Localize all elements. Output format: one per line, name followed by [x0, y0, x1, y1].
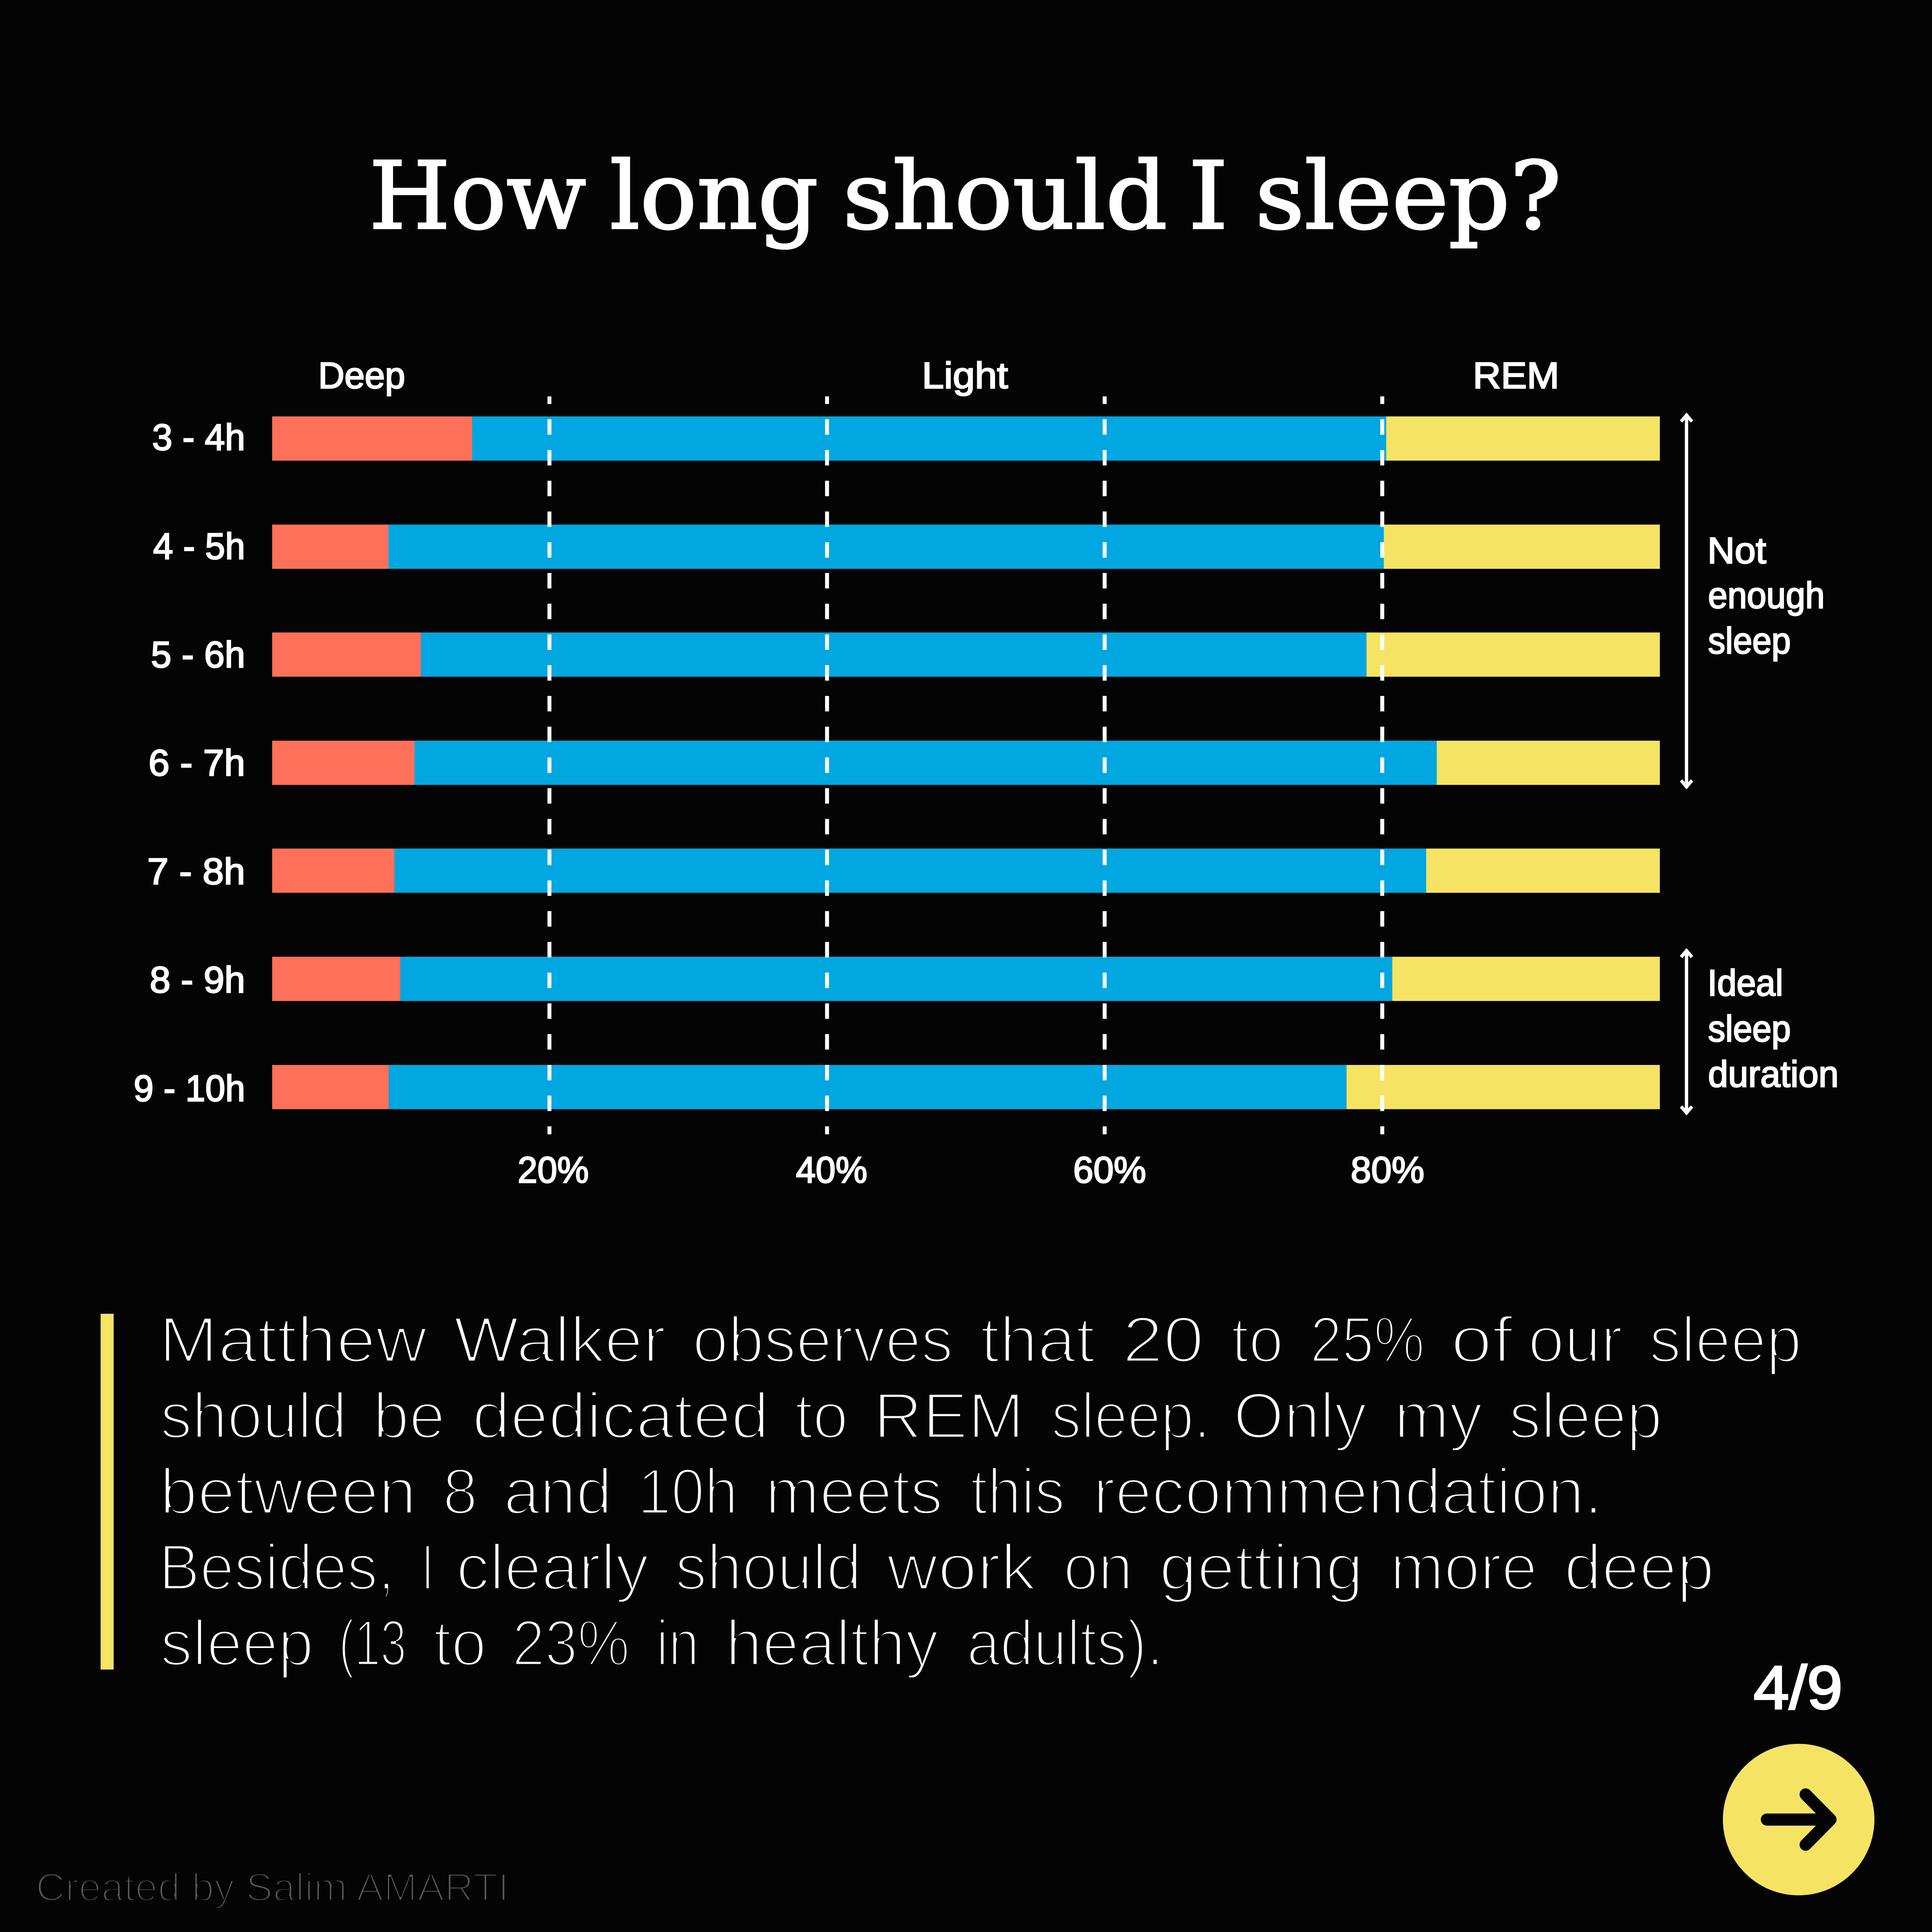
annotation: Not enough sleep: enough	[1708, 575, 1825, 616]
body text block: sleep	[1509, 1379, 1662, 1452]
credit: Created by Salim AMARTI	[36, 1865, 509, 1909]
row: 9 - 10h: 9 - 10h	[134, 1068, 245, 1109]
body text block: our	[1528, 1303, 1622, 1376]
title: I	[1188, 142, 1228, 250]
body text block: 8	[443, 1455, 478, 1528]
body text block: recommendation.	[1093, 1455, 1602, 1528]
annotation: Not enough sleep: Not	[1708, 530, 1766, 571]
body text block: sleep.	[1051, 1379, 1211, 1452]
body text block: Walker	[454, 1303, 666, 1376]
body text block: on	[1063, 1531, 1133, 1604]
body text block: to	[434, 1607, 486, 1679]
row: 7 - 8h	[147, 849, 1660, 893]
body text block: 20	[1122, 1303, 1204, 1376]
body text block: I	[422, 1531, 434, 1604]
row: 7 - 8h: 7 - 8h	[147, 851, 245, 892]
body text block: getting	[1159, 1531, 1364, 1604]
title: should	[843, 142, 1167, 250]
body text block	[159, 1303, 1802, 1679]
column heading: REM: REM	[1473, 355, 1559, 396]
quote accent bar	[100, 1314, 114, 1670]
body text block: dedicated	[472, 1379, 769, 1452]
body text block: Besides,	[159, 1531, 395, 1604]
body text block: adults).	[967, 1607, 1163, 1679]
body text block: more	[1390, 1531, 1537, 1604]
body text block: meets	[765, 1455, 943, 1528]
chart: sleep stages by sleep duration	[134, 355, 1660, 1190]
body text block: (13	[339, 1607, 406, 1679]
body text block: of	[1451, 1303, 1513, 1376]
row: 3 - 4h	[152, 417, 1660, 461]
title: long	[610, 142, 818, 250]
body text block: my	[1394, 1379, 1483, 1452]
row: 8 - 9h	[150, 957, 1660, 1001]
row: 8 - 9h: 8 - 9h	[150, 959, 245, 1000]
body text block: this	[971, 1455, 1065, 1528]
body text block: sleep	[160, 1607, 314, 1679]
body text block: clearly	[456, 1531, 649, 1604]
page number: 4/9	[1753, 1653, 1843, 1722]
body text block: and	[504, 1455, 612, 1528]
body text block: REM	[873, 1379, 1024, 1452]
axis label: 80%: 80%	[1351, 1149, 1424, 1190]
body text block: should	[160, 1379, 347, 1452]
row: 4 - 5h	[153, 525, 1660, 569]
body text block: between	[160, 1455, 417, 1528]
body text block: 23%	[512, 1607, 630, 1679]
body text block: Matthew	[159, 1303, 427, 1376]
row: 5 - 6h: 5 - 6h	[151, 634, 245, 675]
body text block: 10h	[638, 1455, 738, 1528]
body text block: sleep	[1649, 1303, 1802, 1376]
body text block: to	[795, 1379, 848, 1452]
annotation: Ideal sleep duration: sleep	[1708, 1008, 1791, 1049]
body text block: to	[1231, 1303, 1284, 1376]
body text block: observes	[692, 1303, 953, 1376]
axis label: 40%: 40%	[796, 1149, 867, 1190]
body text block: that	[980, 1303, 1095, 1376]
annotation: Ideal sleep duration: Ideal	[1708, 962, 1783, 1003]
row: 6 - 7h	[148, 741, 1660, 785]
body text block: deep	[1564, 1531, 1714, 1604]
column heading: Light: Light	[922, 355, 1008, 396]
title: How	[369, 142, 586, 250]
axis label: 60%: 60%	[1073, 1149, 1146, 1190]
annotation: Ideal sleep duration	[1708, 962, 1838, 1095]
body text block: Only	[1233, 1379, 1367, 1452]
annotation: Ideal sleep duration: duration	[1708, 1053, 1838, 1095]
row: 4 - 5h: 4 - 5h	[153, 526, 245, 567]
body text block: work	[886, 1531, 1036, 1604]
annotation: Not enough sleep: sleep	[1708, 620, 1791, 661]
row: 5 - 6h	[151, 633, 1660, 677]
axis label: 20%: 20%	[518, 1149, 589, 1190]
title: sleep?	[1255, 142, 1561, 250]
body text block: 25%	[1310, 1303, 1425, 1376]
body text block: be	[373, 1379, 445, 1452]
body text block: should	[675, 1531, 862, 1604]
row: 9 - 10h	[134, 1065, 1660, 1109]
body text block: in	[656, 1607, 699, 1679]
row: 3 - 4h: 3 - 4h	[152, 417, 245, 458]
arrow: not enough sleep range	[1681, 414, 1692, 788]
annotation: Not enough sleep	[1708, 530, 1825, 661]
body text block: healthy	[726, 1607, 939, 1679]
title	[369, 142, 1561, 250]
column heading: Deep: Deep	[318, 355, 405, 396]
next button with arrow icon	[1723, 1744, 1874, 1895]
arrow: ideal sleep duration range	[1681, 949, 1692, 1114]
row: 6 - 7h: 6 - 7h	[148, 742, 245, 783]
